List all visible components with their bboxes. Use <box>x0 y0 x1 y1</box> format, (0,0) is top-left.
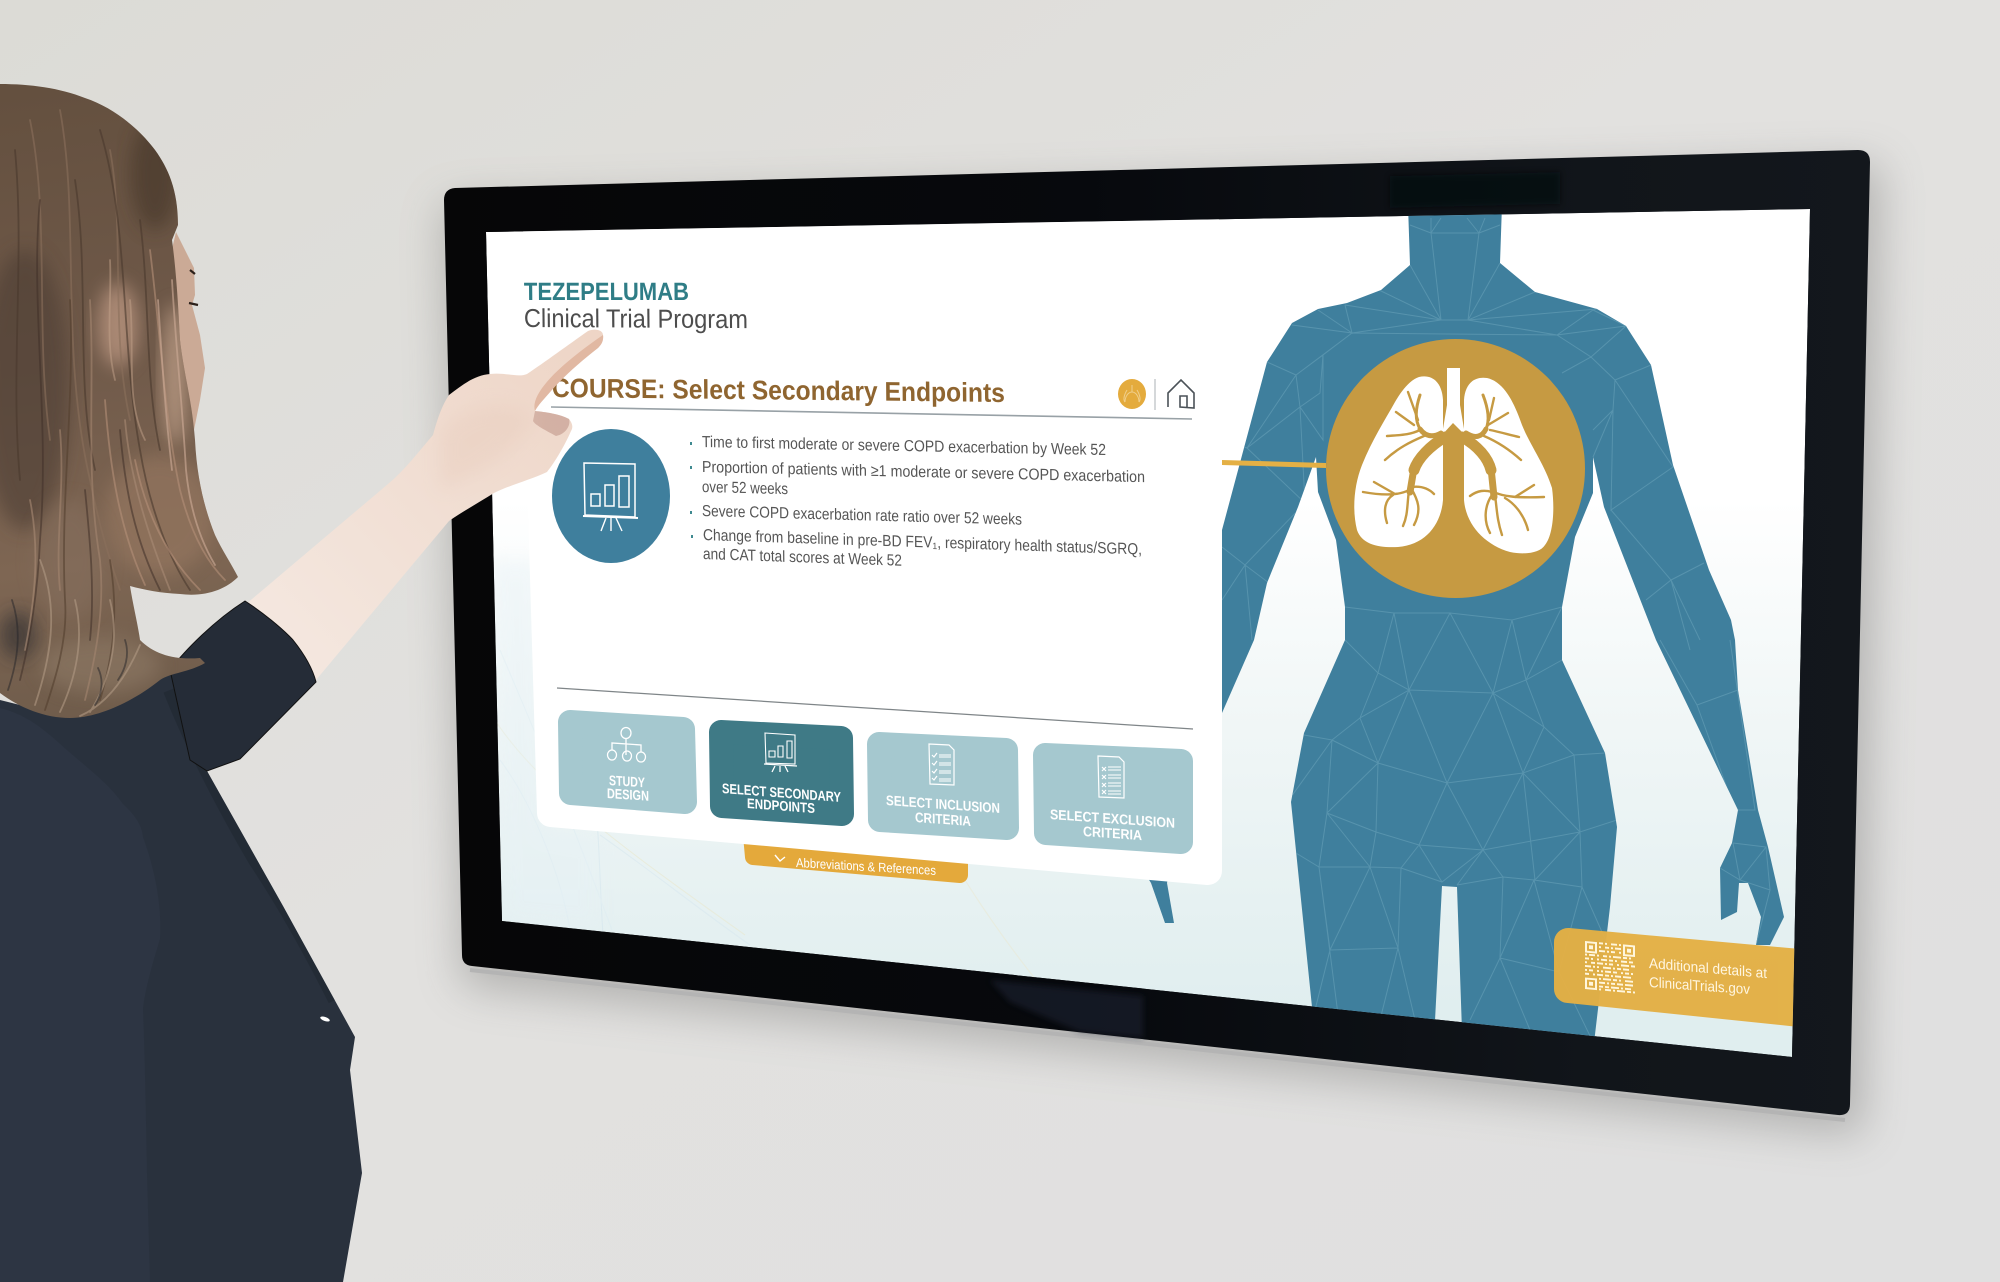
white lungs <box>1354 376 1553 553</box>
monitor bezel <box>444 150 1870 1115</box>
clinicaltrials.gov callout <box>1568 942 1810 1014</box>
abbreviations tab <box>751 835 960 875</box>
thumb shadow <box>533 411 569 436</box>
gold circle <box>1326 339 1585 598</box>
screen background <box>486 209 1810 1057</box>
white content card <box>534 228 1208 871</box>
jacket cuff sleeve <box>170 601 316 771</box>
button shape <box>1045 755 1181 842</box>
finger shading <box>534 335 603 411</box>
button label line 2: ENDPOINTS <box>747 795 815 816</box>
section heading: COURSE: Select Secondary Endpoints <box>552 373 1005 408</box>
hair tones and strands <box>0 110 225 716</box>
hand tone <box>440 405 535 490</box>
face sliver <box>160 232 205 450</box>
tab shape <box>751 835 960 875</box>
body silhouette <box>1149 214 1784 1036</box>
mini lungs <box>1124 385 1140 402</box>
jacket upper sleeve <box>0 708 160 1282</box>
callout tab <box>1568 942 1810 1014</box>
trachea <box>1443 368 1464 432</box>
bronchi <box>1363 392 1544 535</box>
header divider <box>1154 379 1156 410</box>
button label line 1: SELECT INCLUSION <box>886 792 1000 816</box>
jacket white spot <box>320 1015 330 1023</box>
tab text: Abbreviations & References <box>796 855 936 878</box>
icon: home <box>1168 380 1194 408</box>
icon: checklist document <box>929 744 954 785</box>
bullet 2 line 2: over 52 weeks <box>702 479 788 498</box>
monitor drop shadow on wall <box>444 165 1880 1135</box>
teal circle <box>552 429 670 563</box>
title: drug name: TEZEPELUMAB <box>524 278 689 306</box>
button label line 1: SELECT SECONDARY <box>722 780 842 805</box>
eyebrow and eyelash <box>189 270 198 305</box>
arm and pointing hand <box>245 330 603 680</box>
nav button: select secondary endpoints (active) <box>721 732 842 816</box>
nav button: select inclusion criteria <box>879 744 1007 829</box>
navigation divider <box>557 688 1193 729</box>
icon: exclusion document <box>1098 756 1124 798</box>
button label line 2: CRITERIA <box>915 809 971 829</box>
button label line 1: SELECT EXCLUSION <box>1050 806 1175 831</box>
bullet list: secondary endpoints <box>690 434 1145 570</box>
button shape <box>570 722 685 802</box>
body mesh lines <box>1222 218 1770 1040</box>
title block <box>524 278 748 334</box>
wall-mounted touchscreen monitor <box>444 150 1870 1120</box>
connector line to lungs <box>1222 460 1326 468</box>
board ledge <box>583 516 638 518</box>
board <box>584 463 635 517</box>
lungs callout <box>1326 339 1585 598</box>
subtitle: Clinical Trial Program <box>524 303 748 334</box>
callout text line 2: ClinicalTrials.gov <box>1649 975 1751 998</box>
icon: presentation chart in teal circle <box>552 429 670 563</box>
hair <box>0 84 238 718</box>
button label line 2: CRITERIA <box>1083 823 1142 843</box>
decorative background curves <box>495 650 1040 985</box>
bullet 2 line 1: Proportion of patients with ≥1 moderate or severe COPD exacerbation <box>702 459 1145 486</box>
bullet 4 line 2: and CAT total scores at Week 52 <box>703 546 902 570</box>
screen content <box>486 205 1810 1060</box>
person pointing at screen <box>0 84 603 1282</box>
button label line 1: STUDY <box>609 772 646 790</box>
nav button: select exclusion criteria <box>1045 755 1181 843</box>
bezel reflection top <box>1390 172 1560 208</box>
icon: chart board <box>764 733 797 772</box>
bullet 3: Severe COPD exacerbation rate ratio over 52 weeks <box>702 503 1022 529</box>
bezel reflection bottom <box>990 980 1143 1038</box>
nav button: study design <box>570 722 685 804</box>
button shape <box>879 744 1007 828</box>
jacket body <box>0 665 362 1282</box>
chart bars <box>591 476 629 507</box>
heading rule <box>551 407 1192 419</box>
chevron <box>775 855 785 861</box>
jacket lapel fold <box>170 690 335 1000</box>
icon: lungs button <box>1118 379 1146 409</box>
abbreviations tab label <box>774 854 936 875</box>
callout text line 1: Additional details at <box>1649 956 1767 982</box>
hair mass <box>0 84 238 718</box>
human body figure with low-poly mesh <box>1149 214 1784 1036</box>
bullet markers <box>690 442 693 538</box>
bullet 4 line 1: Change from baseline in pre-BD FEV₁, respiratory health status/SGRQ, <box>703 527 1142 558</box>
button shape <box>721 732 842 814</box>
bullet 1: Time to first moderate or severe COPD exacerbation by Week 52 <box>702 434 1106 459</box>
easel legs <box>601 518 622 531</box>
button label line 2: DESIGN <box>607 785 649 804</box>
QR code <box>1585 942 1635 993</box>
icon: org chart <box>608 728 646 762</box>
orange disc <box>1118 379 1146 409</box>
silver lower edge of monitor <box>470 970 1845 1120</box>
